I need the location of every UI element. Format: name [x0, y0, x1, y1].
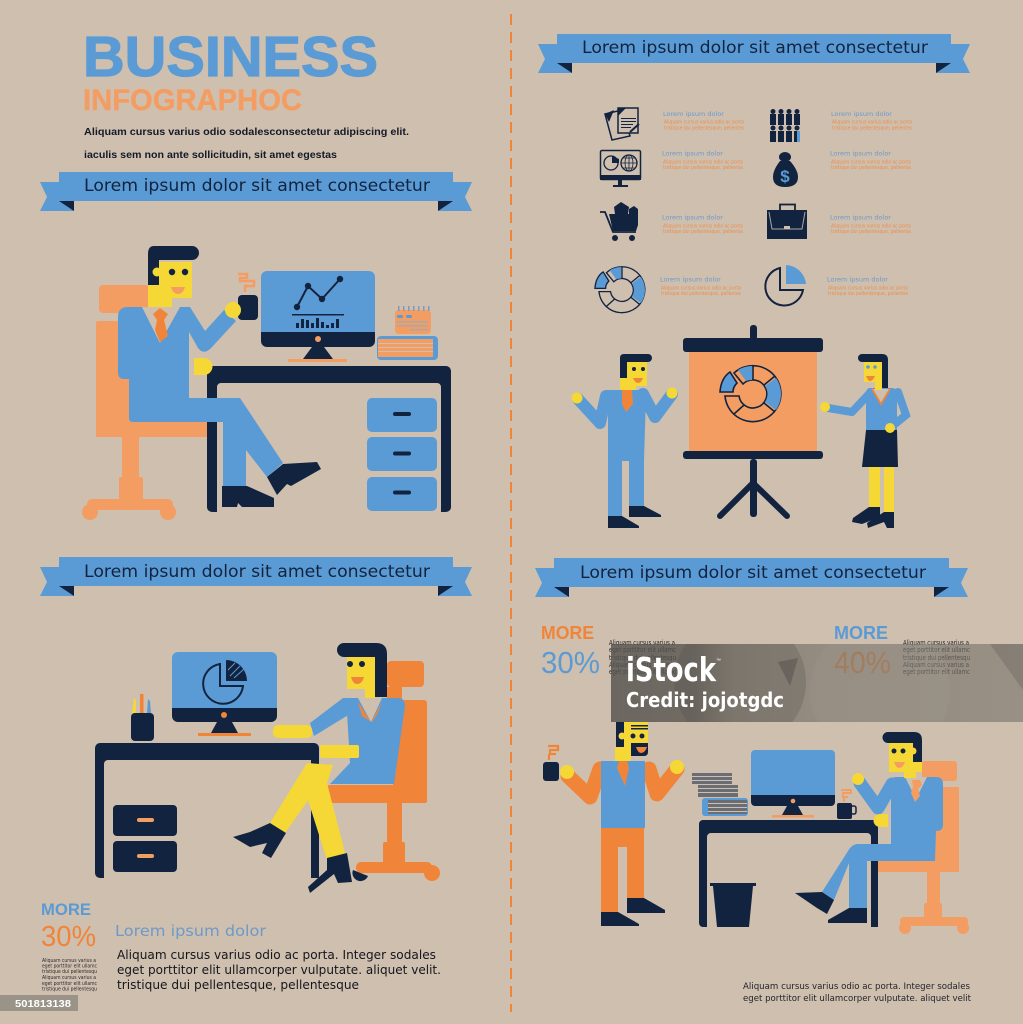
stats: more 30 percent: Aliquam cursus varius a	[609, 639, 675, 647]
panel: two men at desk	[543, 722, 969, 934]
icon: documents	[605, 108, 639, 140]
pen cup	[131, 694, 154, 741]
chair	[82, 285, 208, 520]
intro text	[84, 126, 409, 161]
small text: eget porttitor elit ullamc	[42, 981, 97, 987]
text block: bottom left	[115, 922, 441, 992]
stats: more 40 percent: Aliquam cursus varius a	[903, 639, 969, 647]
icon: donut chart	[595, 267, 645, 313]
stats: more 30 percent: eget porttitor elit ullamc	[609, 646, 676, 654]
label: item 3: Lorem ipsum dolor	[662, 150, 724, 158]
stats: more 30 percent: MORE	[541, 623, 594, 643]
label: item 2: tristique dui pellentesque, pellentes	[832, 126, 912, 132]
image id tag	[0, 995, 78, 1011]
label: item 6: tristique dui pellentesque, pellentes	[831, 229, 911, 235]
text block: bottom left: Lorem ipsum dolor	[115, 922, 267, 940]
monitor	[751, 750, 835, 818]
label: item 4	[830, 150, 911, 171]
presenter woman	[820, 354, 906, 528]
stats: more 40 percent: MORE	[834, 623, 888, 643]
label: item 8: tristique dui pellentesque, pellentes	[828, 291, 908, 297]
presenter man	[572, 354, 678, 528]
ribbon heading: top right: Lorem ipsum dolor sit amet consectetur	[582, 38, 928, 58]
watermark text: ™	[716, 658, 721, 664]
label: item 1	[663, 111, 744, 132]
ribbon heading: top left	[40, 172, 472, 211]
small text: eget porttitor elit ullamc	[42, 964, 97, 970]
title: business: BUSINESS	[83, 25, 378, 89]
stats: more 30 percent: eget porttitor elit ullamc	[609, 668, 676, 676]
small text	[42, 958, 97, 992]
seated man	[795, 732, 943, 923]
donut on screen	[720, 366, 781, 422]
stats: more 40 percent: Aliquam cursus varius a	[903, 661, 969, 669]
stats: more 40 percent	[834, 623, 970, 680]
panel: presentation	[572, 325, 906, 528]
man figure	[118, 246, 321, 507]
ribbon heading: lower right: Lorem ipsum dolor sit amet consectetur	[580, 563, 926, 583]
text block: bottom right	[743, 982, 971, 1004]
label: item 5: tristique dui pellentesque, pellentes	[663, 229, 743, 235]
drawers	[113, 805, 177, 872]
label: item 7: Aliquam cursus varius odio ac porta	[661, 286, 741, 292]
label: item 8: Aliquam cursus varius odio ac porta	[828, 286, 908, 292]
intro text: Aliquam cursus varius odio sodalesconsectetur adipiscing elit.	[84, 126, 409, 138]
icon: money bag: $	[780, 167, 790, 186]
watermark text: Credit: jojotgdc	[626, 688, 784, 712]
stats: more 30 percent: 30%	[541, 645, 600, 680]
standing man	[560, 722, 684, 926]
coffee cup on desk	[837, 790, 856, 819]
label: item 2	[831, 111, 912, 132]
text block: bottom right: eget porttitor elit ullamcorper vulputate. aliquet velit	[743, 994, 971, 1004]
label: item 5: Aliquam cursus varius odio ac porta	[663, 224, 743, 230]
label: item 5: Lorem ipsum dolor	[662, 214, 724, 222]
label: item 4: Aliquam cursus varius odio ac porta	[831, 160, 911, 166]
image id tag: 501813138	[15, 998, 71, 1010]
small text: tristique dui pellentesqu	[42, 969, 97, 975]
desk	[699, 820, 878, 927]
label: item 3: Aliquam cursus varius odio ac porta	[663, 160, 743, 166]
ribbon heading: lower left	[40, 557, 472, 596]
monitor with pie	[172, 652, 277, 736]
label: item 5	[662, 214, 743, 235]
label: item 3	[662, 150, 743, 171]
intro text: iaculis sem non ante sollicitudin, sit amet egestas	[84, 149, 337, 161]
paper stacks	[692, 773, 748, 816]
watermark text	[626, 650, 784, 712]
text block: bottom left: eget porttitor elit ullamcorper vulputate. aliquet velit.	[117, 962, 441, 977]
stats: more 40 percent: eget porttitor elit ullamc	[903, 646, 970, 654]
watermark text: iStock	[626, 650, 717, 689]
icon: briefcase	[767, 204, 807, 239]
label: item 8: Lorem ipsum dolor	[827, 276, 889, 284]
book and calendar	[377, 306, 438, 360]
coffee cup	[225, 274, 258, 320]
label: item 2: Lorem ipsum dolor	[831, 111, 893, 118]
label: item 6: Lorem ipsum dolor	[830, 214, 892, 222]
small text: tristique dui pellentesqu	[42, 986, 97, 992]
label: item 1: tristique dui pellentesque, pellentes	[664, 126, 744, 132]
monitor with chart	[261, 271, 375, 362]
label: item 7: Lorem ipsum dolor	[660, 276, 722, 284]
coffee cup	[543, 746, 559, 781]
icon: shopping cart	[600, 202, 638, 241]
drawers	[367, 398, 437, 511]
stats: more 30 percent: tristique dui pellentesqu	[609, 654, 676, 662]
icon list	[595, 108, 912, 313]
label: item 8	[827, 276, 908, 297]
icon: money bag	[773, 152, 798, 187]
small text: Aliquam cursus varius a	[42, 975, 96, 981]
stats: more 30 percent	[541, 623, 676, 680]
label: item 7: tristique dui pellentesque, pellentes	[661, 291, 741, 297]
label: item 4: tristique dui pellentesque, pellentes	[831, 165, 911, 171]
text block: bottom left: tristique dui pellentesque, pellentesque	[117, 977, 359, 992]
small text: Aliquam cursus varius a	[42, 958, 96, 964]
stats: more 40 percent: eget porttitor elit ullamc	[903, 668, 970, 676]
subtitle: infographoc: INFOGRAPHOC	[83, 84, 302, 117]
trash bin	[710, 883, 756, 927]
stats: more 40 percent: tristique dui pellentesqu	[903, 654, 970, 662]
text block: bottom left: Aliquam cursus varius odio ac porta. Integer sodales	[117, 947, 436, 962]
stats: more 40 percent: 40%	[834, 645, 891, 680]
label: item 1: Lorem ipsum dolor	[663, 111, 725, 118]
icon: pie chart	[765, 265, 806, 306]
label: item 6: Aliquam cursus varius odio ac porta	[831, 224, 911, 230]
ribbon heading: top left: Lorem ipsum dolor sit amet consectetur	[84, 176, 430, 196]
woman figure	[233, 643, 405, 893]
panel: man at desk	[82, 246, 451, 520]
watermark band	[611, 644, 1023, 722]
desk	[95, 743, 319, 878]
chair	[328, 661, 440, 881]
projection screen	[683, 325, 823, 517]
label: item 2: Aliquam cursus varius odio ac porta	[832, 120, 912, 126]
ribbon heading: lower left: Lorem ipsum dolor sit amet consectetur	[84, 562, 430, 582]
stats: bottom left	[41, 900, 97, 992]
more label: MORE	[41, 900, 91, 919]
desk	[207, 366, 451, 512]
icon: people	[770, 109, 800, 142]
panel: woman at desk	[95, 643, 440, 893]
label: item 3: tristique dui pellentesque, pellentes	[663, 165, 743, 171]
icon: monitor with charts	[600, 150, 641, 187]
label: item 6	[830, 214, 911, 235]
stats: more 30 percent: Aliquam cursus varius a	[609, 661, 675, 669]
label: item 7	[660, 276, 741, 297]
title block	[83, 25, 409, 161]
chair	[878, 761, 969, 934]
label: item 1: Aliquam cursus varius odio ac porta	[664, 120, 744, 126]
text block: bottom right: Aliquam cursus varius odio ac porta. Integer sodales	[743, 982, 970, 992]
ribbon heading: top right	[538, 34, 970, 73]
label: item 4: Lorem ipsum dolor	[830, 150, 892, 158]
percent: 30%	[41, 921, 96, 953]
ribbon heading: lower right	[535, 558, 968, 597]
